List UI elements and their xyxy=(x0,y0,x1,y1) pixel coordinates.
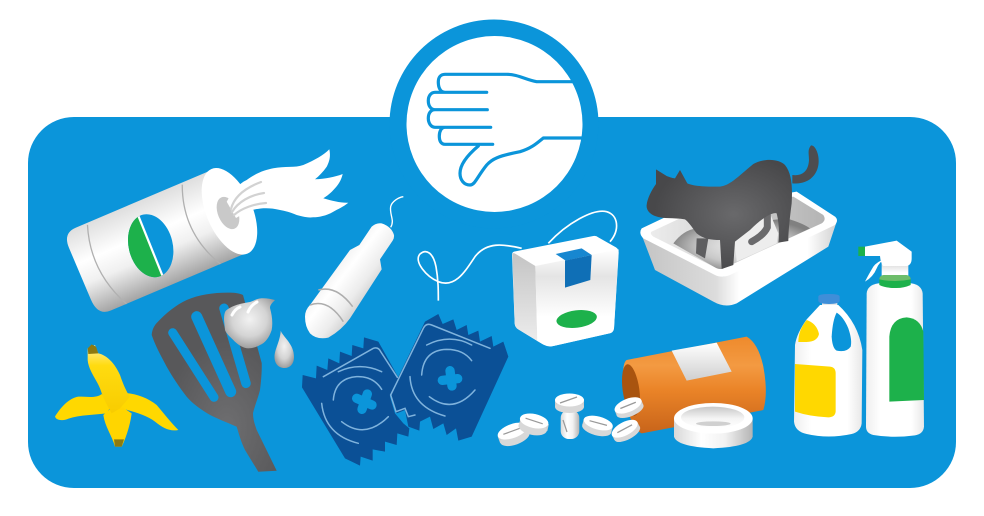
icon: tampon xyxy=(305,197,403,338)
icon: torn condom wrappers xyxy=(302,314,508,466)
icon: wet wipes canister xyxy=(62,149,348,317)
collar xyxy=(879,275,911,288)
cap xyxy=(674,418,753,448)
blob xyxy=(224,298,275,348)
icon: banana peel xyxy=(55,344,178,447)
logo xyxy=(128,214,174,278)
trigger xyxy=(865,258,886,282)
icon: thumbs down badge xyxy=(406,36,582,212)
litter box xyxy=(640,192,837,305)
label xyxy=(889,317,924,402)
cat xyxy=(647,145,819,269)
icon: orange pill bottle xyxy=(609,337,766,448)
head xyxy=(865,241,912,266)
icon: cat in litter box xyxy=(640,145,837,305)
pills spilling xyxy=(612,394,646,421)
label xyxy=(672,343,732,381)
drop xyxy=(274,331,294,368)
cap xyxy=(818,294,840,304)
tissue xyxy=(227,149,348,218)
icon: scattered pills xyxy=(495,394,614,450)
icon: floss box xyxy=(418,211,619,346)
icon: spatula with lubricant blob xyxy=(152,293,294,472)
icon: bleach jug xyxy=(794,294,862,436)
icon: spray bottle xyxy=(858,241,924,437)
